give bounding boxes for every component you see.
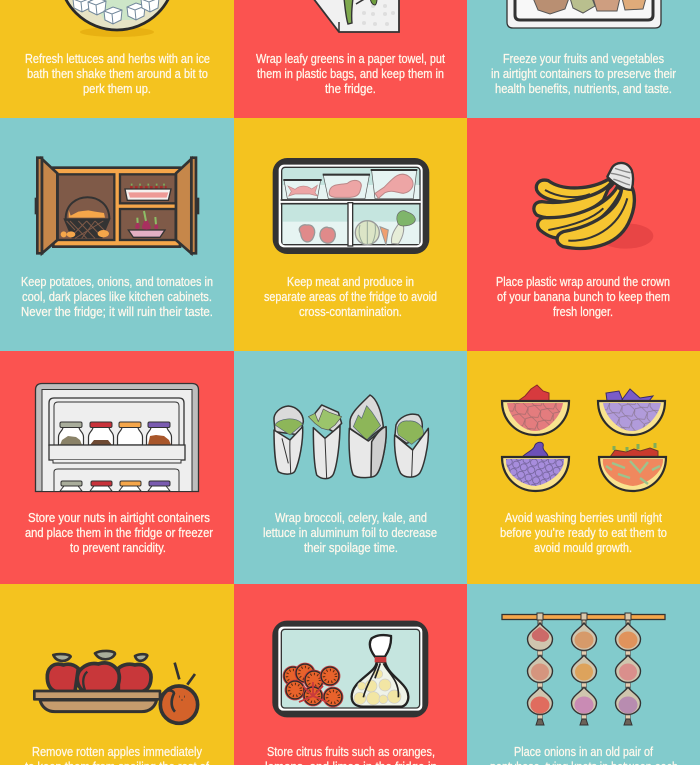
icon: bowls of berries xyxy=(502,385,666,491)
text: meat and produce tip xyxy=(264,275,437,319)
panel: ice bath xyxy=(0,0,234,118)
text: banana tip xyxy=(496,275,670,319)
panel: banana xyxy=(467,118,700,351)
icon: onions hung in pantyhose xyxy=(502,613,665,725)
text: ice bath tip: bath then shake them around a bit to xyxy=(27,67,208,81)
text: nuts tip: Store your nuts in airtight containers xyxy=(28,511,210,525)
panel: foil wrap xyxy=(234,351,467,584)
text: meat and produce tip: cross-contamination. xyxy=(299,305,402,319)
text: cabinet tip: Keep potatoes, onions, and tomatoes in xyxy=(21,275,213,289)
text: berries tip xyxy=(500,511,667,555)
sub-icon: blueberry bowl xyxy=(502,442,569,491)
icon: bowl of lettuce and ice xyxy=(59,0,175,37)
text: berries tip: before you're ready to eat them to xyxy=(500,526,667,540)
icon: freezer drawer with bags xyxy=(507,0,661,28)
panel: freeze xyxy=(467,0,700,118)
text: meat and produce tip: Keep meat and produce in xyxy=(287,275,414,289)
icon: fridge with meat and produce xyxy=(273,158,429,254)
icon: bag of lemons xyxy=(352,635,408,707)
text: freeze tip: Freeze your fruits and vegetables xyxy=(503,52,664,66)
text: paper towel tip xyxy=(256,52,445,96)
text: citrus tip: Store citrus fruits such as oranges, xyxy=(267,745,435,759)
text: banana tip: fresh longer. xyxy=(553,305,613,319)
text: ice bath tip xyxy=(25,52,210,96)
text: cabinet tip: Never the fridge; it will ruin their taste. xyxy=(21,305,213,319)
text: citrus tip xyxy=(265,745,437,765)
sub-icon: raspberry bowl xyxy=(502,385,569,435)
text: paper towel tip: Wrap leafy greens in a paper towel, put xyxy=(256,52,445,66)
icon: fridge with citrus in bags xyxy=(272,621,428,717)
text: freeze tip: in airtight containers to preserve their xyxy=(491,67,676,81)
panel: meat and produce xyxy=(234,118,467,351)
text: paper towel tip: the fridge. xyxy=(325,82,376,96)
text: freeze tip: health benefits, nutrients, and taste. xyxy=(495,82,672,96)
text: foil wrap tip: their spoilage time. xyxy=(304,541,398,555)
text: apples tip: Remove rotten apples immediately xyxy=(32,745,203,759)
panel: onions xyxy=(467,584,700,765)
text: foil wrap tip: lettuce in aluminum foil to decrease xyxy=(263,526,437,540)
icon: apples on a plate xyxy=(34,651,198,723)
panel: apples xyxy=(0,584,234,765)
text: onions tip: Place onions in an old pair of xyxy=(514,745,653,759)
panel: berries xyxy=(467,351,700,584)
text: berries tip: avoid mould growth. xyxy=(534,541,632,555)
icon: vegetables wrapped in foil xyxy=(274,395,428,479)
sub-icon: strawberry bowl xyxy=(599,443,666,491)
text: freeze tip xyxy=(491,52,676,96)
icon: kitchen cabinet xyxy=(35,158,199,253)
sub-icon: plum bowl xyxy=(598,389,665,435)
panel: cabinet xyxy=(0,118,234,351)
text: ice bath tip: perk them up. xyxy=(83,82,151,96)
icon: banana bunch with wrapped crown xyxy=(534,163,653,249)
panel: paper towel xyxy=(234,0,467,118)
text: berries tip: Avoid washing berries until right xyxy=(505,511,662,525)
text: nuts tip xyxy=(25,511,213,555)
text: foil wrap tip xyxy=(263,511,437,555)
text: foil wrap tip: Wrap broccoli, celery, kale, and xyxy=(275,511,427,525)
text: meat and produce tip: separate areas of the fridge to avoid xyxy=(264,290,437,304)
text: ice bath tip: Refresh lettuces and herbs with an ice xyxy=(25,52,210,66)
text: nuts tip: and place them in the fridge or freezer xyxy=(25,526,213,540)
icon: greens in paper towel xyxy=(313,0,399,32)
text: banana tip: Place plastic wrap around the crown xyxy=(496,275,670,289)
text: apples tip xyxy=(25,745,209,765)
icon: fridge door with jars of nuts xyxy=(36,384,198,492)
text: paper towel tip: them in plastic bags, and keep them in xyxy=(257,67,444,81)
text: onions tip xyxy=(490,745,678,765)
panel: nuts xyxy=(0,351,234,584)
text: nuts tip: to prevent rancidity. xyxy=(70,541,166,555)
text: banana tip: of your banana bunch to keep them xyxy=(497,290,670,304)
icon: net of oranges xyxy=(283,663,343,707)
panel: citrus xyxy=(234,584,467,765)
text: cabinet tip: cool, dark places like kitchen cabinets. xyxy=(22,290,212,304)
text: cabinet tip xyxy=(21,275,213,319)
